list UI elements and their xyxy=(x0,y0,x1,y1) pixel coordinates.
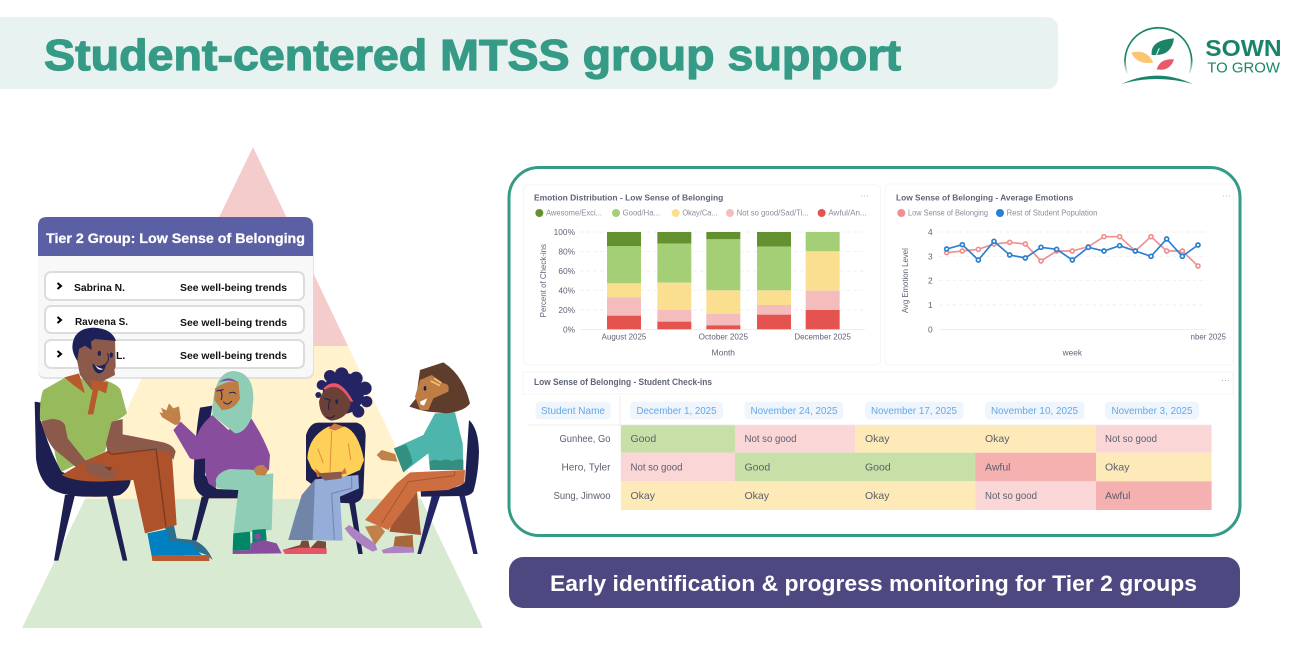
illustration: four seated people xyxy=(35,328,479,561)
row: Sung, Jinwoo: Awful xyxy=(1105,490,1130,502)
chart legend: Good/Ha... xyxy=(623,208,660,218)
chart legend: Not so good/Sad/Ti... xyxy=(737,208,809,218)
title banner xyxy=(0,17,1058,89)
x axis labels: October 2025 xyxy=(699,332,748,342)
row: Raveena S.: See well-being trends xyxy=(180,317,287,329)
chart: average emotions line chart: ··· xyxy=(1222,191,1231,201)
row: Hero, Tyler: Hero, Tyler xyxy=(562,462,611,474)
row: Sung, Jinwoo: Okay xyxy=(865,490,890,502)
table header: December 1, 2025 xyxy=(636,405,717,417)
y axis labels xyxy=(554,227,576,335)
pyramid tier 3 xyxy=(157,147,348,346)
person: man in green shirt xyxy=(35,328,213,561)
y axis labels: 2 xyxy=(928,276,933,286)
pyramid tier 2 xyxy=(85,346,421,499)
row: Gunhee, Go: Good xyxy=(630,433,656,445)
y axis labels: 1 xyxy=(928,300,933,310)
chart: average emotions line chart xyxy=(885,184,1233,365)
x axis labels xyxy=(1062,332,1226,357)
table header: Student Name xyxy=(541,405,605,417)
title: Student-centered MTSS group support xyxy=(44,31,901,80)
pyramid tier 1 xyxy=(22,499,483,628)
row: Sung, Jinwoo: Okay xyxy=(744,490,770,502)
chart legend: Okay/Ca... xyxy=(682,208,718,218)
table header: November 3, 2025 xyxy=(1112,405,1193,417)
row: Gunhee, Go: Okay xyxy=(985,433,1010,445)
chart legend: Low Sense of Belonging xyxy=(908,208,988,218)
row: Hero, Tyler: Good xyxy=(744,462,770,474)
callout banner: Early identification & progress monitoring for Tier 2 groups xyxy=(550,571,1197,596)
chart legend xyxy=(535,208,867,218)
row: Raveena S.: Raveena S. xyxy=(75,316,128,328)
chart: emotion distribution stacked bars: ··· xyxy=(860,191,869,201)
chart: emotion distribution stacked bars xyxy=(523,185,881,365)
y axis labels: 0 xyxy=(928,324,933,334)
chart legend: Rest of Student Population xyxy=(1007,208,1098,218)
row: Sung, Jinwoo xyxy=(554,481,1212,510)
logo: Sown to Grow xyxy=(1122,28,1282,84)
row: Gunhee, Go: Not so good xyxy=(744,433,797,445)
row: third student: L. xyxy=(116,350,125,362)
y axis labels: 4 xyxy=(928,227,933,237)
row: Hero, Tyler: Okay xyxy=(1105,462,1130,474)
row: Sung, Jinwoo: Sung, Jinwoo xyxy=(554,490,611,502)
row: Gunhee, Go: Not so good xyxy=(1105,433,1157,445)
callout banner xyxy=(509,557,1240,608)
row: third student xyxy=(45,340,304,368)
row: Raveena S. xyxy=(45,306,304,333)
row: Hero, Tyler: Awful xyxy=(985,462,1010,474)
card header xyxy=(38,217,313,256)
y axis labels: 20% xyxy=(558,305,576,315)
row: Sabrina N. xyxy=(45,272,304,300)
y axis labels: 3 xyxy=(928,251,933,261)
chart: emotion distribution stacked bars: Emotion Distribution - Low Sense of Belonging xyxy=(534,193,723,203)
panel: tier 2 group card xyxy=(38,217,314,379)
line: low sense of belonging xyxy=(945,235,1200,268)
stacked bars xyxy=(607,232,840,329)
x axis labels: nber 2025 xyxy=(1191,332,1226,342)
y axis labels: 0% xyxy=(563,325,576,335)
line: rest of student population xyxy=(945,237,1200,262)
person: woman in hijab xyxy=(159,371,282,554)
table: student check-ins heatmap xyxy=(523,372,1233,510)
x axis labels: December 2025 xyxy=(794,332,851,342)
person: girl in yellow jacket xyxy=(283,367,372,554)
chart legend xyxy=(897,208,1098,218)
row: Gunhee, Go: Okay xyxy=(865,433,890,445)
x axis labels: Month xyxy=(712,347,735,357)
x axis labels: August 2025 xyxy=(602,332,647,342)
table: student check-ins heatmap: ··· xyxy=(1221,375,1230,385)
y axis labels: 60% xyxy=(558,266,576,276)
row: Sung, Jinwoo: Not so good xyxy=(985,490,1037,502)
x axis labels: week xyxy=(1062,347,1083,357)
row: Sabrina N.: Sabrina N. xyxy=(74,282,125,294)
chart: average emotions line chart: Avg Emotion Level xyxy=(900,248,910,313)
y axis labels: 100% xyxy=(554,227,576,237)
chart: average emotions line chart: Low Sense of Belonging - Average Emotions xyxy=(896,193,1073,203)
panel: dashboard frame xyxy=(509,168,1240,536)
logo: Sown to Grow: TO GROW xyxy=(1207,61,1280,77)
row: Sung, Jinwoo: Okay xyxy=(630,490,656,502)
person: woman in teal top xyxy=(345,362,479,554)
row: Hero, Tyler xyxy=(562,453,1212,481)
card heading: Tier 2 Group: Low Sense of Belonging xyxy=(46,231,305,246)
table header: November 24, 2025 xyxy=(750,405,838,417)
row: Hero, Tyler: Not so good xyxy=(630,462,683,474)
y axis labels: 40% xyxy=(558,286,576,296)
row: Sabrina N.: See well-being trends xyxy=(180,282,287,294)
pyramid xyxy=(22,147,483,628)
chart legend: Awesome/Exci... xyxy=(546,208,602,218)
row: Gunhee, Go xyxy=(560,425,1212,453)
table: student check-ins heatmap: Low Sense of Belonging - Student Check-ins xyxy=(534,377,712,387)
chart: emotion distribution stacked bars: Percent of Check-ins xyxy=(538,244,548,317)
row: third student: See well-being trends xyxy=(180,350,287,362)
x axis labels xyxy=(602,332,851,357)
y axis labels: 80% xyxy=(558,247,576,257)
table header: November 10, 2025 xyxy=(991,405,1078,417)
table header: November 17, 2025 xyxy=(871,405,957,417)
y axis labels xyxy=(928,227,933,334)
logo: Sown to Grow: SOWN xyxy=(1205,35,1282,61)
table header xyxy=(528,396,1211,425)
row: Gunhee, Go: Gunhee, Go xyxy=(560,433,611,445)
row: Hero, Tyler: Good xyxy=(865,462,891,474)
chart legend: Awful/An... xyxy=(828,208,867,218)
